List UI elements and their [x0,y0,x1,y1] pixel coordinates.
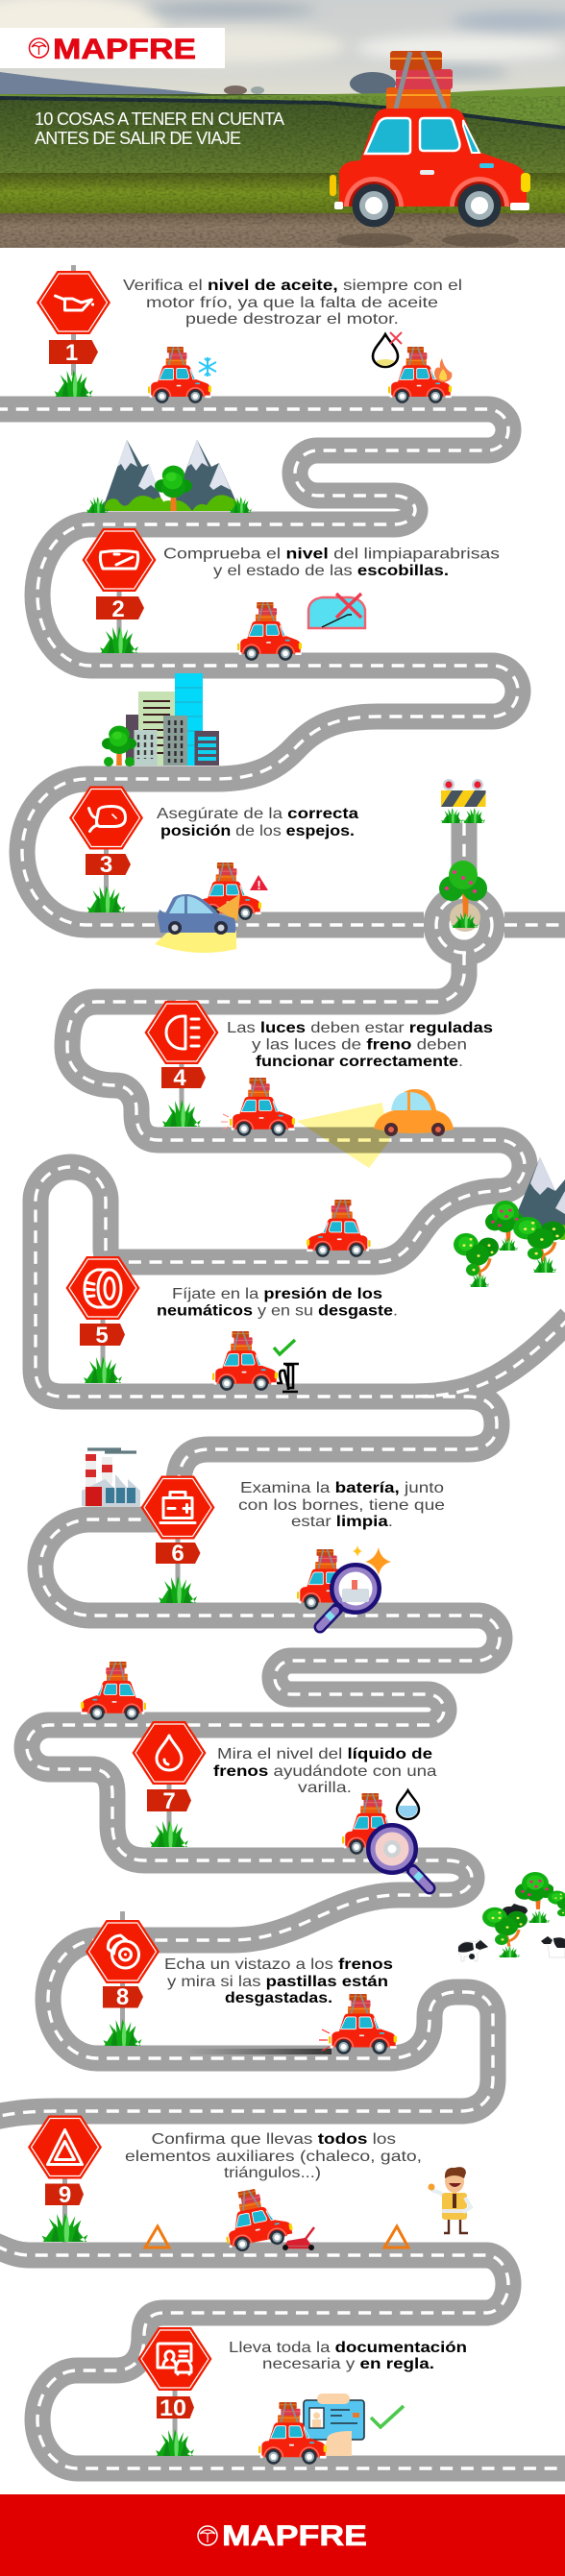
text 1: puede destrozar el motor. [185,311,399,328]
road network [0,409,565,2468]
barrier [441,779,486,823]
text 8 [164,1956,393,2006]
sign 1: 1 [65,340,78,366]
sign 1 [37,265,111,397]
text 10: necesaria y en regla. [262,2356,434,2372]
hero car [330,51,530,227]
car with warning and blue car [155,863,268,953]
sign 4 [144,1001,219,1127]
text 6: con los bornes, tiene que [238,1497,445,1514]
text 8: y mira si las pastillas están [167,1974,388,1990]
text 4: funcionar correctamente . [256,1054,463,1070]
text 7: varilla. [298,1780,352,1796]
text 5: Fíjate en la presión de los [172,1286,382,1302]
text 7: Mira el nivel del líquido de [217,1746,432,1762]
man with vest [429,2167,471,2233]
car [81,1662,146,1720]
title: 10 COSAS A TENER EN CUENTA [35,109,284,129]
text 3: posición de los espejos. [160,823,355,839]
text 8: desgastadas. [225,1990,332,2006]
text 6 [238,1480,445,1530]
text 8: Echa un vistazo a los frenos [164,1956,393,1973]
text 1: motor frío, ya que la falta de aceite [146,295,438,311]
sign 2 [83,528,156,653]
text 9: triángulos...) [224,2165,321,2181]
title: ANTES DE SALIR DE VIAJE [35,129,241,148]
text 2: Comprueba el nivel del limpiaparabrisas [163,546,500,563]
title [35,109,284,148]
text 10: Lleva toda la documentación [229,2340,467,2356]
footer band: MAPFRE [222,2520,367,2552]
trees right [454,1201,565,1287]
icon: windshield with cross [308,594,365,628]
text 10 [229,2340,467,2372]
text 3 [157,806,358,839]
text 7: frenos ayudándote con una [213,1763,437,1780]
logo box: MAPFRE: MAPFRE [53,34,196,65]
text 3: Asegúrate de la correcta [157,806,358,822]
trees and cows [458,1872,565,1961]
mountains with tree [86,440,252,513]
text 1: Verifica el nivel de aceite, siempre con el [123,278,462,294]
sign 5: 5 [95,1323,109,1349]
sign 10: 10 [160,2395,186,2421]
car with magnifier and sparkles [297,1545,391,1627]
sign 10 [138,2327,211,2456]
sign 7: 7 [162,1788,176,1814]
text 4: y las luces de freno deben [252,1037,467,1053]
sign 4: 4 [173,1065,186,1091]
text 7 [213,1746,437,1796]
car with brake lights [221,1078,295,1136]
skid marks and car [185,1994,397,2054]
sign 9 [28,2115,102,2242]
sign 8: 8 [116,1984,129,2010]
orange car [374,1089,454,1136]
text 2: y el estado de las escobillas. [213,563,449,579]
text 1 [123,278,462,328]
car with magnifier and drop [342,1790,430,1888]
text 9: Confirma que llevas todos los [152,2131,396,2148]
sign 5 [65,1256,140,1383]
sign 8 [86,1911,160,2046]
text 9: elementos auxiliares (chaleco, gato, [125,2149,422,2165]
text 2 [163,546,500,579]
footer band [0,2494,565,2576]
text 6: estar limpia . [291,1514,393,1530]
car with snowflake [148,347,216,403]
text 4: Las luces deben estar reguladas [227,1020,493,1036]
car with oil drop and flame [373,332,452,403]
roundabout tree [439,861,487,939]
sign 7 [133,1721,206,1847]
car [307,1200,371,1257]
warning triangle left [145,2226,169,2248]
sign 6 [140,1475,215,1604]
car with pump [212,1331,299,1392]
sign 9: 9 [59,2182,71,2208]
headlight beam [297,1103,390,1168]
sign 2: 2 [111,596,125,622]
sign 3 [69,786,143,912]
car [237,602,302,661]
car with licence card and check [258,2394,404,2465]
mountain right [517,1157,565,1240]
sign 3: 3 [100,852,112,878]
factory [82,1449,140,1506]
text 6: Examina la batería, junto [240,1480,444,1496]
text 5 [157,1286,398,1320]
car with warning and blue car: ! [257,878,261,892]
tilted car with jack [218,2183,314,2254]
buildings [102,673,219,766]
text 5: neumáticos y en su desgaste . [157,1302,398,1320]
text 9 [125,2131,422,2181]
warning triangle right [384,2226,408,2248]
text 4 [227,1020,493,1070]
header photo: landscape [0,0,565,248]
sign 6: 6 [171,1541,184,1567]
logo box: MAPFRE [0,28,225,68]
